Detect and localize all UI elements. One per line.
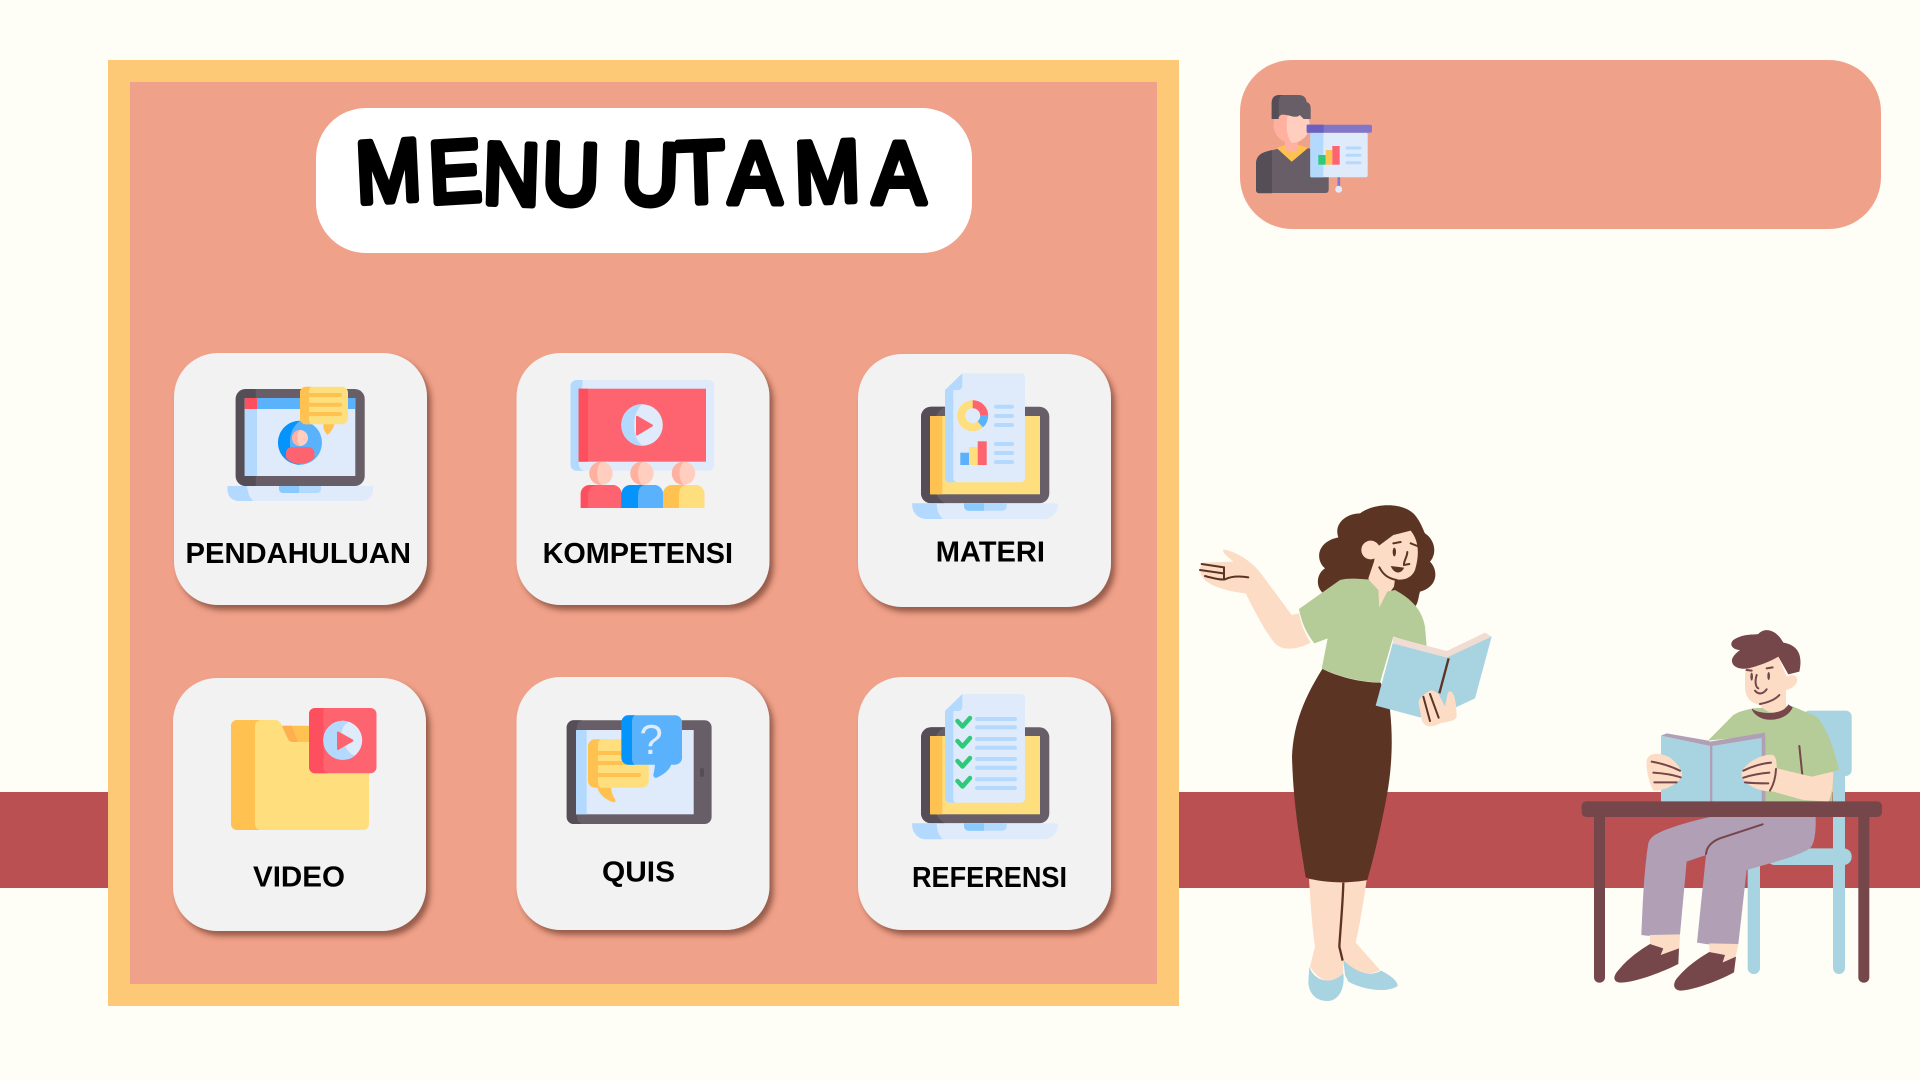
shirt: [1708, 706, 1839, 802]
card: video: [173, 678, 426, 931]
question mark: ?: [639, 716, 663, 763]
icon: folder with video: [231, 708, 376, 830]
legs: [1309, 879, 1380, 982]
label: MATERI: [936, 537, 1045, 569]
label: QUIS: [602, 857, 675, 889]
icon: laptop with checklist: [912, 694, 1058, 839]
illustration: man reading at desk: [1582, 630, 1882, 991]
open book: [1376, 633, 1492, 717]
card: pendahuluan: [174, 353, 427, 605]
card: materi: [858, 354, 1111, 607]
head: [1731, 630, 1800, 720]
icon: laptop with report document: [912, 373, 1058, 519]
label: VIDEO: [253, 862, 345, 894]
blouse: [1299, 579, 1427, 683]
panel: main menu: [119, 71, 1168, 995]
card: kompetensi: [516, 353, 770, 605]
shoes: [1308, 960, 1398, 1001]
icon: tablet with question bubbles: [567, 715, 712, 824]
card: quis: [516, 677, 770, 930]
label: KOMPETENSI: [543, 538, 733, 570]
arm and hand: [1200, 549, 1311, 649]
open book: [1661, 733, 1765, 802]
card: referensi: [858, 677, 1111, 930]
icon: presenter with chart board: [1256, 95, 1372, 193]
hair: [1318, 505, 1435, 607]
label: REFERENSI: [912, 862, 1067, 894]
holding hand: [1419, 690, 1457, 726]
left hand: [1647, 754, 1682, 791]
icon: laptop with chat and avatar: [228, 387, 373, 501]
label: PENDAHULUAN: [186, 538, 411, 570]
chair: [1748, 711, 1852, 974]
skirt: [1292, 669, 1392, 882]
title text: MENU UTAMA: [354, 120, 926, 224]
illustration: woman teacher holding book: [1200, 505, 1492, 1001]
panel: top right pill: [1240, 60, 1881, 229]
background red band: [0, 792, 1920, 888]
right hand and forearm: [1742, 755, 1833, 802]
desk: [1582, 801, 1882, 983]
icon: presentation screen with audience: [570, 380, 714, 508]
title pill: [316, 108, 972, 253]
trousers: [1641, 817, 1816, 945]
head: [1361, 531, 1418, 607]
feet and shoes: [1614, 934, 1738, 991]
